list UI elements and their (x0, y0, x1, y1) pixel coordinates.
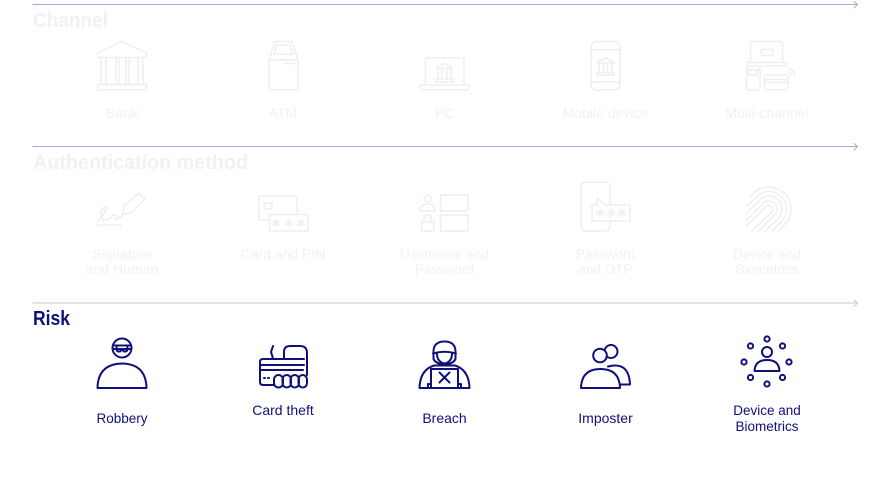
label: password and OTP (576, 247, 635, 277)
label: username and password: Password (415, 262, 474, 277)
icon: imposter (581, 345, 630, 388)
label: device and biometrics: Biometrics (735, 419, 799, 434)
label: ATM: ATM (269, 105, 297, 121)
icon: bank (98, 42, 146, 90)
label: username and password: Username and (400, 247, 489, 262)
label: password and OTP: and OTP (578, 262, 633, 277)
icon: multi-channel (746, 42, 795, 90)
heading: risk: Risk (33, 308, 71, 330)
label: PC: PC (435, 105, 454, 121)
icon: fingerprint (746, 187, 791, 231)
label: robbery: Robbery (96, 411, 148, 426)
icon: password and OTP (581, 182, 630, 231)
arrow: risk (33, 300, 858, 306)
icon: mobile device (591, 42, 620, 90)
label: password and OTP: Password (576, 247, 635, 262)
label: device and biometrics: Biometrics (735, 262, 799, 277)
label: signature and human (86, 246, 158, 277)
label: device and biometrics (733, 403, 801, 434)
icon: device and biometrics (741, 336, 792, 387)
panel: risk (33, 300, 858, 434)
label: bank: Bank (106, 105, 139, 121)
icon: signature (97, 193, 145, 225)
label: mobile device: Mobile device (563, 105, 649, 121)
icon: ATM (269, 42, 298, 90)
icon: username and password (420, 195, 468, 231)
icon: breach (420, 342, 470, 388)
heading: authentication method: Authentication method (33, 152, 248, 174)
panel: authentication method (33, 144, 858, 277)
label: signature and human: Signature (92, 246, 152, 262)
icon: PC (420, 58, 469, 90)
label: card and PIN: Card and PIN (241, 246, 325, 262)
icon: card theft (260, 346, 307, 388)
panel: channel (33, 2, 858, 121)
heading: channel: Channel (33, 10, 108, 32)
arrow: channel (33, 2, 858, 8)
label: card theft: Card theft (252, 402, 314, 418)
icon: card and PIN (259, 196, 308, 231)
label: imposter: Imposter (578, 410, 633, 426)
label: signature and human: and Human (86, 261, 158, 277)
arrow: authentication method (33, 144, 858, 150)
label: device and biometrics (733, 247, 801, 277)
label: username and password (400, 247, 489, 277)
icon: robbery (98, 338, 146, 388)
label: device and biometrics: Device and (733, 247, 801, 262)
label: multi-channel: Multi-channel (725, 105, 809, 121)
label: breach: Breach (422, 410, 467, 426)
label: device and biometrics: Device and (733, 403, 801, 418)
